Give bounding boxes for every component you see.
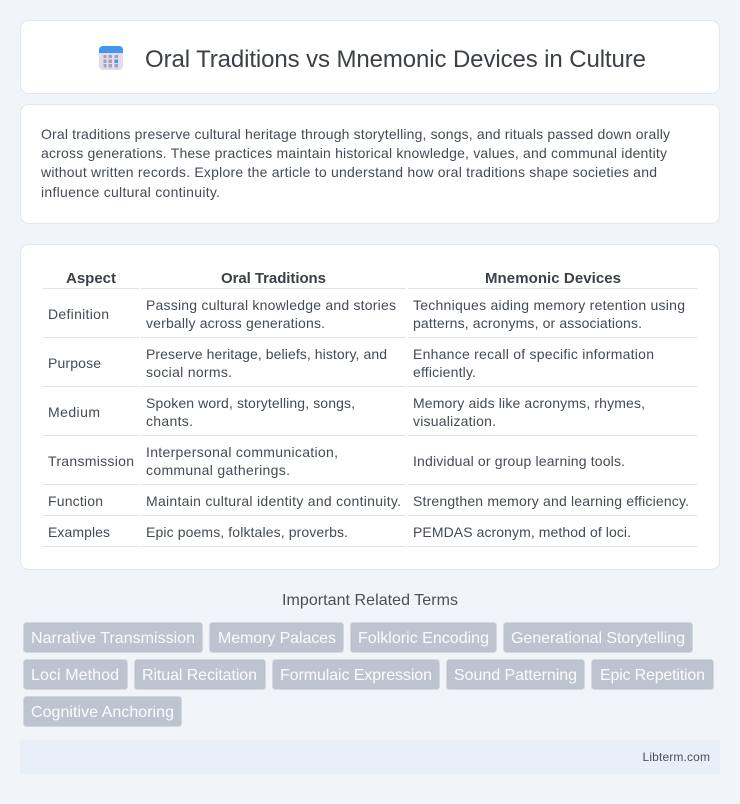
row: function: Maintain cultural identity and continuity. bbox=[146, 493, 401, 509]
row: definition: Definition bbox=[48, 306, 109, 322]
text block: intro paragraph: across generations. These practices maintain historical knowledge, values, and communal identity bbox=[41, 145, 667, 161]
tags: related terms: Folkloric Encoding bbox=[358, 630, 489, 647]
row: purpose: Enhance recall of specific information bbox=[413, 346, 654, 362]
row: medium: Medium bbox=[48, 404, 100, 420]
panel: comparison table bbox=[20, 244, 720, 570]
row: transmission: Transmission bbox=[48, 453, 134, 469]
row: transmission: Interpersonal communication, bbox=[146, 444, 338, 460]
tags: related terms: Memory Palaces bbox=[218, 630, 336, 647]
row: examples: Examples bbox=[48, 524, 110, 540]
row: purpose bbox=[48, 346, 654, 380]
row: function: Strengthen memory and learning efficiency. bbox=[413, 493, 689, 509]
row: purpose: efficiently. bbox=[413, 364, 476, 380]
row: medium: visualization. bbox=[413, 413, 496, 429]
tags: related terms: Generational Storytelling bbox=[511, 630, 685, 647]
row: transmission bbox=[48, 444, 625, 478]
row: purpose: Preserve heritage, beliefs, history, and bbox=[146, 346, 387, 362]
row: function bbox=[48, 493, 689, 509]
icon: calendar bbox=[99, 46, 123, 70]
tags: related terms: Loci Method bbox=[31, 667, 119, 684]
text block: intro paragraph bbox=[40, 126, 670, 200]
row: medium bbox=[48, 395, 645, 429]
row: medium: Memory aids like acronyms, rhymes, bbox=[413, 395, 645, 411]
row: definition: Passing cultural knowledge and stories bbox=[146, 297, 396, 313]
tags: related terms: Sound Patterning bbox=[454, 667, 577, 684]
row: transmission: Individual or group learning tools. bbox=[413, 453, 625, 469]
table header: Oral Traditions bbox=[221, 270, 326, 287]
tags: related terms: Ritual Recitation bbox=[142, 667, 257, 684]
footer credit: Libterm.com bbox=[642, 750, 710, 764]
tags: related terms: Narrative Transmission bbox=[31, 630, 195, 647]
tags: related terms bbox=[24, 622, 714, 726]
table header: Mnemonic Devices bbox=[485, 270, 621, 287]
text block: intro paragraph: without written records. Explore the article to understand how oral traditions shape societies and bbox=[40, 164, 657, 180]
tags: related terms: Epic Repetition bbox=[600, 667, 705, 684]
row: definition bbox=[48, 297, 685, 331]
title: Oral Traditions vs Mnemonic Devices in Culture bbox=[145, 46, 646, 73]
footer bbox=[20, 740, 720, 774]
row: medium: chants. bbox=[146, 413, 193, 429]
row: medium: Spoken word, storytelling, songs, bbox=[146, 395, 355, 411]
text block: intro paragraph: influence cultural continuity. bbox=[41, 184, 220, 200]
table header: Aspect bbox=[66, 270, 116, 287]
row: examples bbox=[48, 524, 631, 540]
text block: intro paragraph: Oral traditions preserve cultural heritage through storytelling, songs, and rituals passed down orally bbox=[41, 126, 670, 142]
panel: introduction bbox=[20, 104, 720, 224]
row: definition: verbally across generations. bbox=[146, 315, 325, 331]
panel: header bbox=[20, 20, 720, 94]
row: purpose: Purpose bbox=[48, 355, 101, 371]
row: examples: PEMDAS acronym, method of loci. bbox=[413, 524, 631, 540]
row: function: Function bbox=[48, 493, 103, 509]
row: purpose: social norms. bbox=[146, 364, 232, 380]
tags: related terms: Cognitive Anchoring bbox=[31, 704, 174, 721]
row: examples: Epic poems, folktales, proverbs. bbox=[146, 524, 348, 540]
row: transmission: communal gatherings. bbox=[146, 462, 290, 478]
heading: related terms: Important Related Terms bbox=[282, 592, 458, 609]
row: definition: patterns, acronyms, or associations. bbox=[413, 315, 642, 331]
row: definition: Techniques aiding memory retention using bbox=[413, 297, 685, 313]
table header bbox=[66, 270, 621, 287]
tags: related terms: Formulaic Expression bbox=[280, 667, 432, 684]
